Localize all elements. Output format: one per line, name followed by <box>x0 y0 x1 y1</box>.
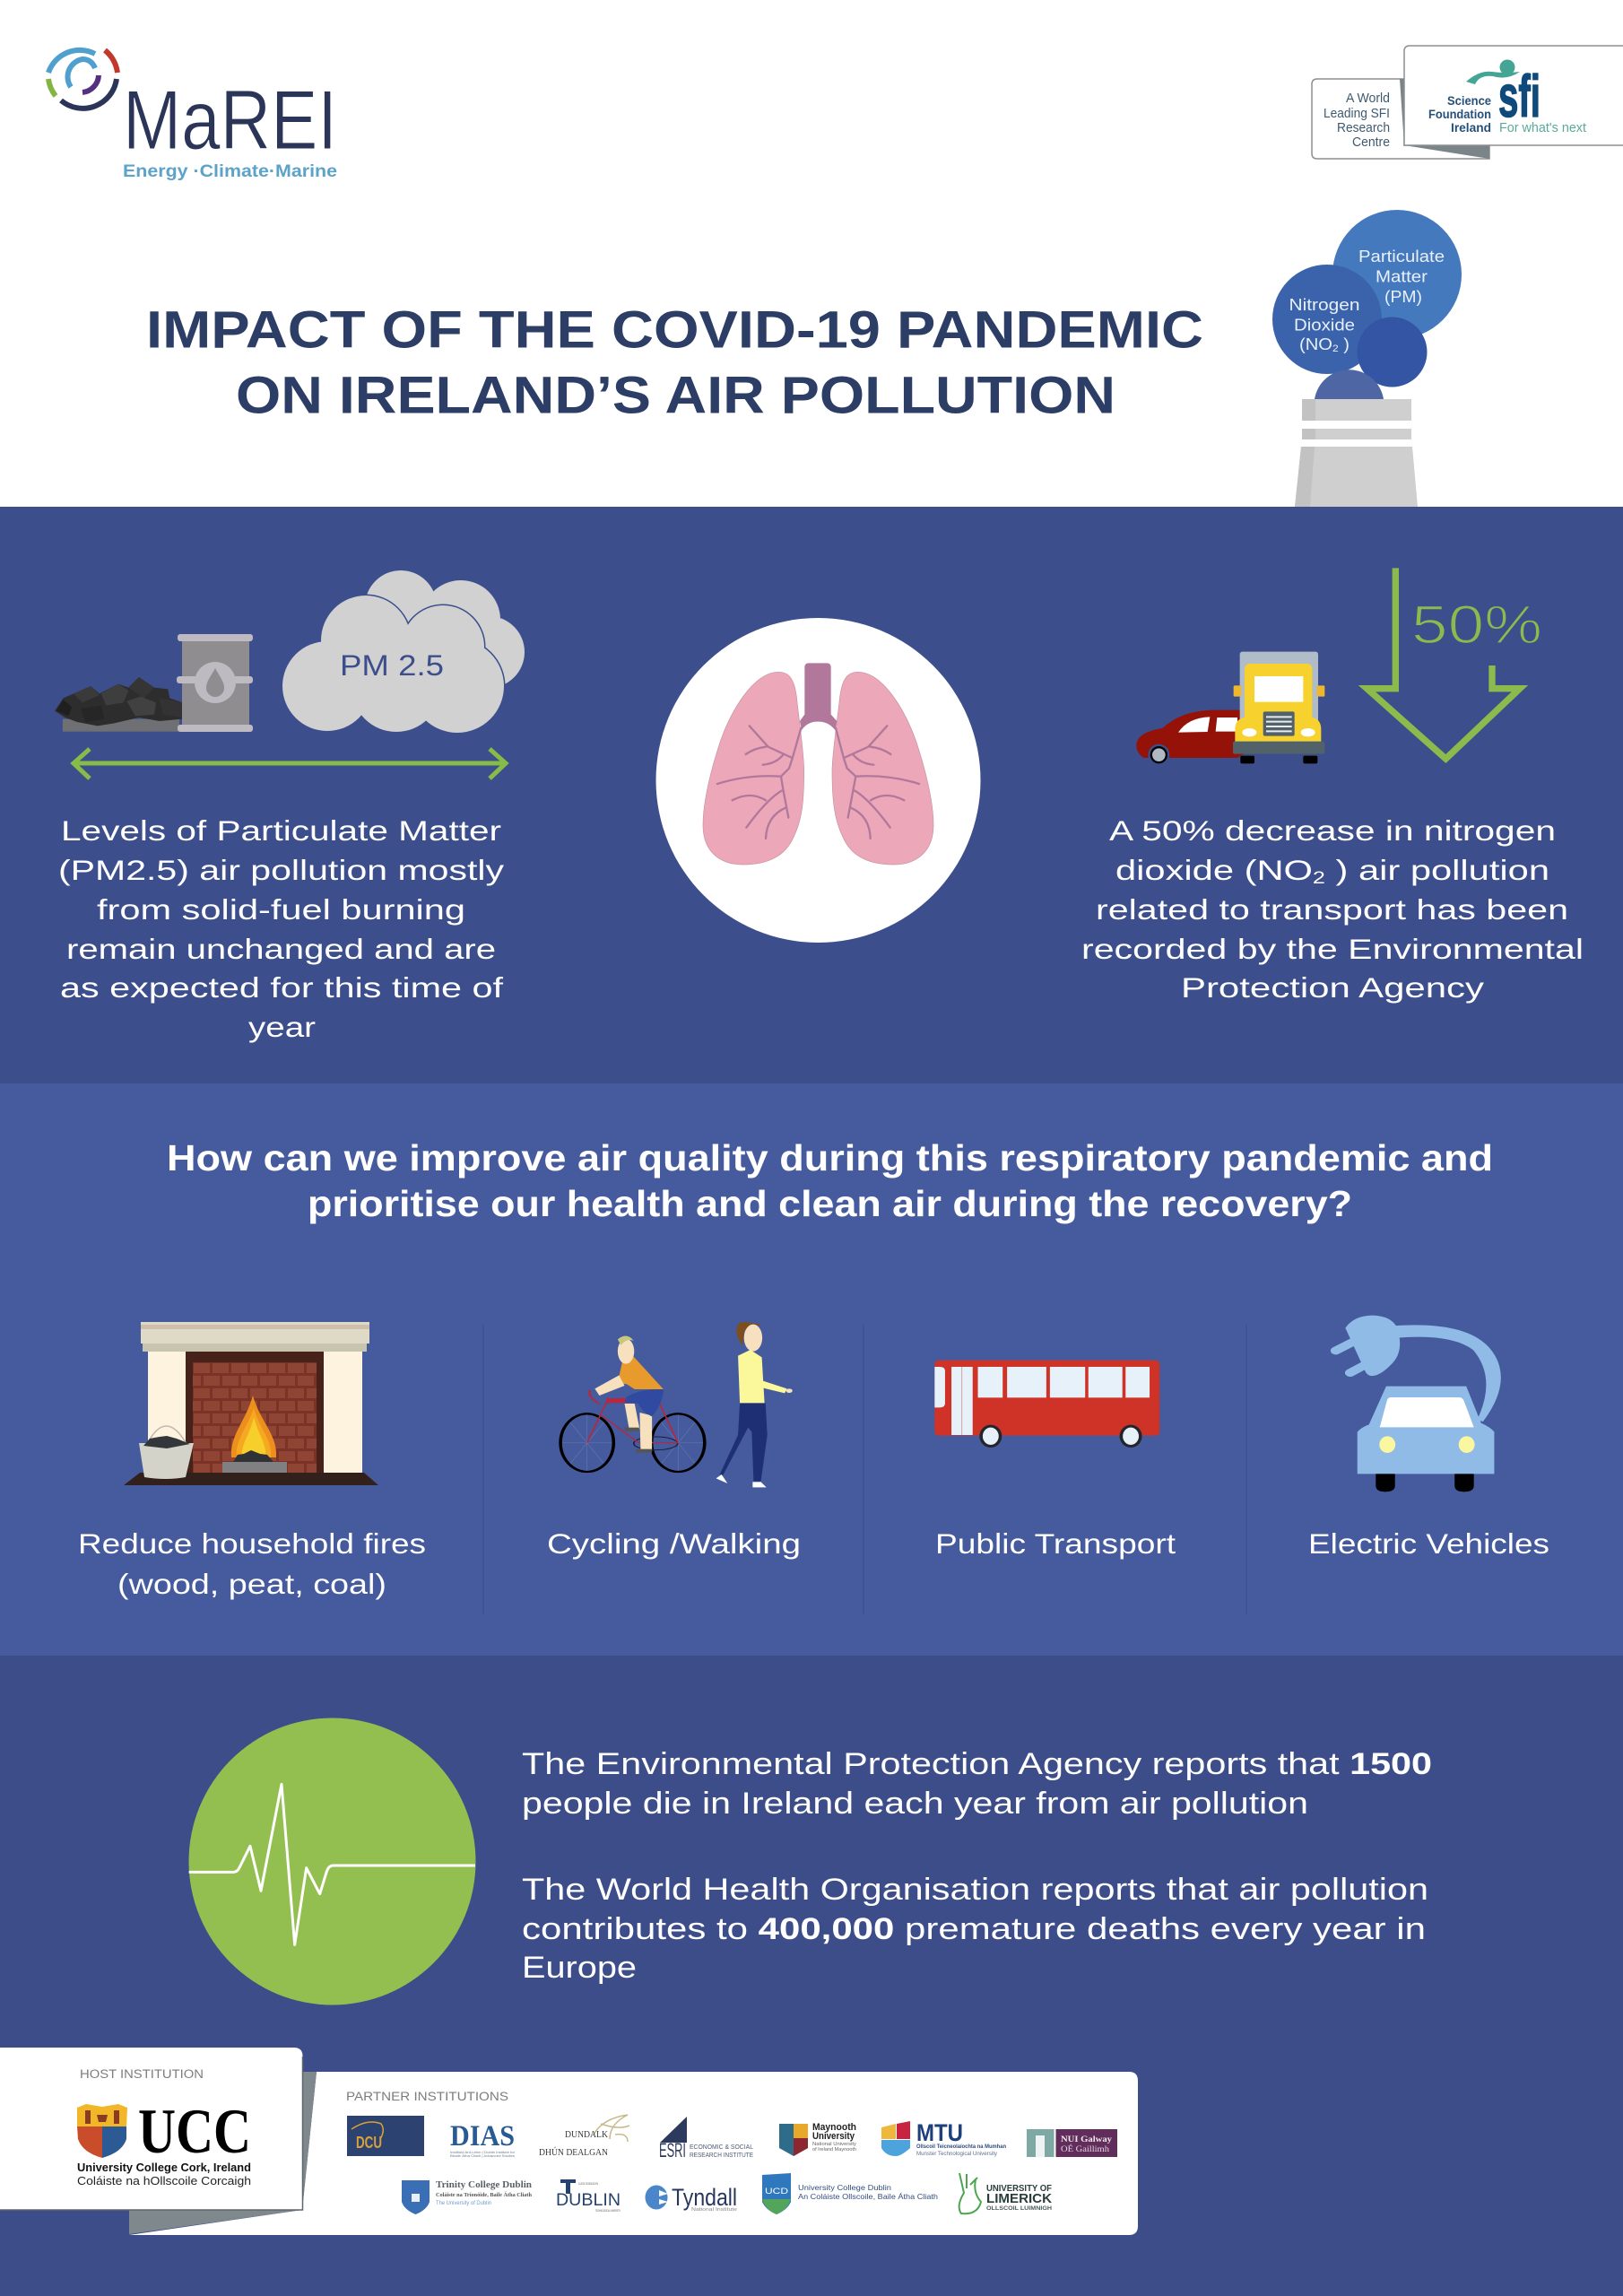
text block: WHO statistic: The World Health Organisation reports that air pollution <box>522 1873 1428 1907</box>
label: reduce household fires <box>78 1527 426 1600</box>
text block: nitrogen dioxide finding <box>1081 814 1584 1004</box>
text block: nitrogen dioxide finding: dioxide (NO <box>1115 854 1264 886</box>
icon: PM 2.5 cloud <box>282 570 525 733</box>
logo: UCD: University College Dublin <box>798 2183 891 2192</box>
logo: Science Foundation Ireland: Science <box>1447 93 1491 108</box>
label: nitrogen dioxide: ) <box>1339 335 1350 353</box>
text block: WHO statistic: contributes to 400,000 premature deaths every year in <box>522 1912 1426 1946</box>
logo: TU Dublin <box>556 2179 621 2213</box>
panel: partner institutions <box>129 2072 1138 2235</box>
logo: MaREI: MaREI <box>123 73 337 167</box>
text block: particulate matter finding: Levels of Particulate Matter <box>61 814 501 847</box>
logo: TU Dublin: OLLSCOIL TEICNEOLAÍOCHTA <box>578 2182 598 2186</box>
panel: host institution: HOST INSTITUTION <box>80 2067 204 2081</box>
fold: grey shadow between host and partner boxes <box>129 2072 317 2234</box>
icon: MaREI rings <box>48 50 117 109</box>
logo: DIAS: Bhaile Átha Cliath | Advanced Studies <box>450 2153 515 2158</box>
heading: improve air quality: How can we improve air quality during this respiratory pandemic and <box>167 1137 1493 1178</box>
logo: ESRI: ECONOMIC & SOCIAL <box>690 2143 753 2151</box>
text block: nitrogen dioxide finding: 2 <box>1313 869 1325 888</box>
arrow: unchanged levels <box>74 749 506 778</box>
label: particulate matter: Particulate <box>1358 247 1445 265</box>
logo: UCD: An Coláiste Ollscoile, Baile Átha Cliath <box>798 2192 938 2201</box>
panel: partner institutions: PARTNER INSTITUTIONS <box>346 2089 508 2103</box>
heading: improve air quality <box>167 1137 1493 1224</box>
logo: Maynooth University <box>779 2122 857 2156</box>
text block: EPA statistic <box>522 1747 1432 1821</box>
logo: Maynooth University: University <box>812 2131 855 2142</box>
logo: DIAS: Institiúid Ard-Léinn | Dublin Institute for <box>450 2150 516 2154</box>
logo: DIAS: DIAS <box>450 2120 515 2152</box>
text block: nitrogen dioxide finding: Protection Agency <box>1181 971 1484 1004</box>
label: cycling and walking: Cycling /Walking <box>547 1527 801 1560</box>
cyclist body <box>625 1404 639 1429</box>
title: IMPACT OF THE COVID-19 PANDEMIC <box>146 301 1203 359</box>
text block: WHO statistic: Europe <box>522 1951 637 1985</box>
logo: Trinity College Dublin: The University of Dublin <box>436 2201 491 2206</box>
logo: Maynooth University: Maynooth <box>812 2122 856 2133</box>
icon: lungs in white circle <box>656 618 981 943</box>
icon: PM 2.5 cloud: PM 2.5 <box>340 649 444 682</box>
icon: oil barrel <box>177 634 253 732</box>
logo: University of Limerick: OLLSCOIL LUIMNIGH <box>986 2205 1052 2212</box>
icon: coal pile <box>55 677 183 732</box>
heading: improve air quality: prioritise our health and clean air during the recovery? <box>308 1183 1352 1224</box>
text block: particulate matter finding <box>58 814 504 1043</box>
text block: particulate matter finding: year <box>248 1011 316 1043</box>
coal bucket <box>139 1426 194 1479</box>
logo: University of Limerick: LIMERICK <box>986 2191 1052 2206</box>
text block: nitrogen dioxide finding: related to transport has been <box>1096 893 1568 926</box>
trachea <box>800 663 837 730</box>
logo: TU Dublin: DUBLIN <box>556 2191 621 2210</box>
logo: NUI Galway <box>1027 2129 1117 2157</box>
icon: chimney with pollution bubbles <box>1272 210 1462 507</box>
logo: Tyndall: Tyndall <box>672 2184 737 2211</box>
logo: UCD: UCD <box>765 2187 788 2196</box>
logo: ESRI: ESRI <box>659 2139 686 2161</box>
label: nitrogen dioxide: (NO <box>1299 335 1330 353</box>
label: electric vehicles: Electric Vehicles <box>1308 1527 1549 1560</box>
text block: nitrogen dioxide finding: recorded by the Environmental <box>1081 933 1584 965</box>
logo: MTU: Munster Technological University <box>916 2152 997 2157</box>
label: public transport: Public Transport <box>935 1527 1176 1560</box>
panel: health impacts <box>0 1656 1623 2296</box>
logo: NUI Galway: NUI Galway <box>1061 2135 1112 2144</box>
icon: electric car with plug <box>1336 1316 1501 1492</box>
logo: Tyndall: National Institute <box>691 2207 737 2213</box>
logo: MTU: MTU <box>916 2119 963 2146</box>
bronchi <box>717 726 919 839</box>
logo: Science Foundation Ireland: Leading SFI <box>1324 106 1390 121</box>
logo: Science Foundation Ireland: Research <box>1337 120 1390 135</box>
logo: MTU: Ollscoil Teicneolaíochta na Mumhan <box>916 2144 1006 2150</box>
logo: Science Foundation Ireland <box>1312 46 1623 159</box>
arrow: 50 percent decrease: 50% <box>1411 595 1542 655</box>
logo: Tyndall <box>646 2184 737 2213</box>
text block: nitrogen dioxide finding: ) air pollution <box>1325 854 1549 886</box>
logo: Maynooth University: of Ireland Maynooth <box>812 2147 856 2152</box>
logo: Dundalk: DHÚN DEALGAN <box>539 2147 608 2158</box>
logo: Science Foundation Ireland: Centre <box>1352 135 1390 150</box>
logo: ESRI <box>659 2117 753 2161</box>
logo: Dundalk: DUNDALK <box>565 2129 608 2140</box>
text block: EPA statistic: people die in Ireland each year from air pollution <box>522 1787 1308 1821</box>
label: nitrogen dioxide <box>1289 295 1359 354</box>
flame <box>231 1396 276 1457</box>
logo: DCU <box>347 2116 424 2156</box>
logo: Science Foundation Ireland: For what's next <box>1499 120 1587 135</box>
logo: University of Limerick <box>959 2173 1052 2213</box>
icon: heartbeat in green circle <box>188 1718 475 2005</box>
logo: Trinity College Dublin: Trinity College Dublin <box>436 2180 532 2190</box>
logo: Trinity College Dublin: Coláiste na Tríonóide, Baile Átha Cliath <box>436 2191 533 2198</box>
label: reduce household fires: (wood, peat, coal) <box>117 1568 386 1600</box>
title: ON IRELAND’S AIR POLLUTION <box>236 366 1115 425</box>
text block: particulate matter finding: from solid-fuel burning <box>97 893 465 926</box>
left lung <box>703 672 804 865</box>
logo: TU Dublin: TECHNOLOGICAL UNIVERSITY <box>595 2209 621 2213</box>
logo: UCC crest <box>77 2104 127 2158</box>
logo: NUI Galway: OÉ Gaillimh <box>1061 2144 1109 2154</box>
logo: Science Foundation Ireland: A World <box>1346 91 1390 106</box>
label: particulate matter: Matter <box>1376 267 1428 285</box>
panel: host institution: Coláiste na hOllscoile Corcaigh <box>77 2174 251 2187</box>
panel: host institution <box>0 2048 303 2210</box>
logo: Dundalk <box>539 2115 629 2158</box>
text block: particulate matter finding: (PM2.5) air pollution mostly <box>58 854 504 886</box>
text block: EPA statistic: The Environmental Protection Agency reports that 1500 <box>522 1747 1432 1781</box>
panel: host institution: University College Cork, Ireland <box>77 2161 251 2174</box>
car <box>1136 710 1263 766</box>
logo: MTU <box>881 2119 1006 2157</box>
icon: bus <box>934 1361 1159 1448</box>
logo: MaREI: Energy ·Climate·Marine <box>123 162 337 181</box>
icon: walking woman <box>716 1322 793 1487</box>
icon: fireplace <box>124 1322 378 1485</box>
logo: Science Foundation Ireland: Ireland <box>1451 120 1491 135</box>
icon: cyclist <box>560 1336 705 1472</box>
logo: Maynooth University: National University <box>812 2142 857 2147</box>
label: particulate matter: (PM) <box>1384 287 1422 306</box>
text block: WHO statistic <box>522 1873 1428 1985</box>
logo: Science Foundation Ireland: sfi <box>1498 63 1541 129</box>
logo: Science Foundation Ireland: Foundation <box>1428 107 1491 121</box>
logo: DCU: DCU <box>356 2134 382 2152</box>
logo: UCD <box>762 2173 938 2214</box>
panel: host institution: UCC <box>138 2097 251 2167</box>
arrow: 50 percent decrease <box>1367 568 1542 759</box>
label: particulate matter <box>1358 247 1445 306</box>
label: nitrogen dioxide: Nitrogen <box>1289 295 1359 314</box>
title <box>146 301 1203 425</box>
label: nitrogen dioxide: 2 <box>1332 344 1339 354</box>
logo: University of Limerick: UNIVERSITY OF <box>986 2184 1052 2194</box>
logo: ESRI: RESEARCH INSTITUTE <box>690 2151 753 2159</box>
logo: Trinity College Dublin <box>402 2180 533 2214</box>
panel: pollution findings <box>0 507 1623 1083</box>
panel: how to improve air quality <box>0 1083 1623 1656</box>
icon: car and lorry <box>1136 652 1324 766</box>
text block: nitrogen dioxide finding: A 50% decrease in nitrogen <box>1109 814 1556 847</box>
text block: particulate matter finding: as expected for this time of <box>60 971 503 1004</box>
label: nitrogen dioxide: Dioxide <box>1294 316 1355 334</box>
header background <box>0 0 1623 507</box>
logo: MaREI <box>48 50 337 181</box>
right lung <box>832 672 933 865</box>
lorry <box>1233 652 1324 763</box>
text block: particulate matter finding: remain unchanged and are <box>66 933 496 965</box>
divider <box>483 1325 1246 1614</box>
label: reduce household fires: Reduce household fires <box>78 1527 426 1560</box>
